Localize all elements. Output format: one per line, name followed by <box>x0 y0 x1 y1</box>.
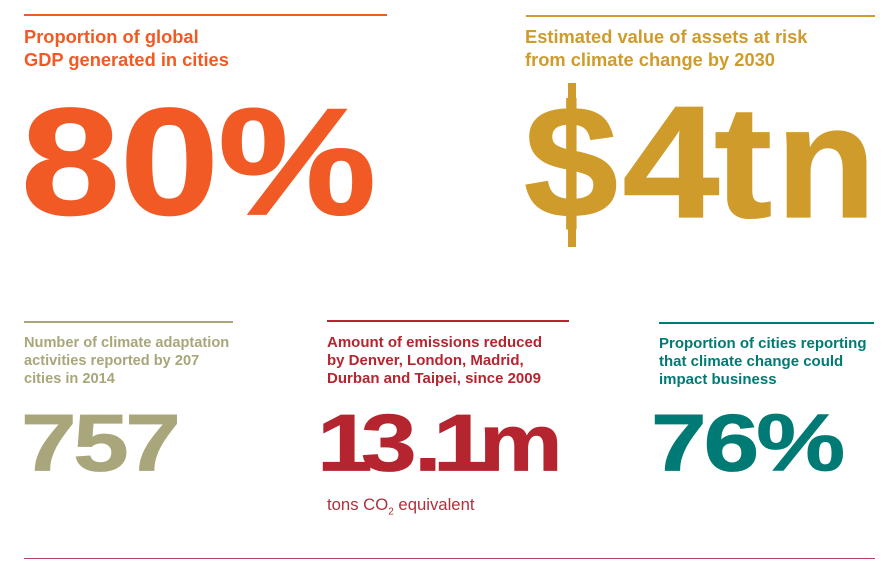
number: $4tn: 4t <box>623 72 776 251</box>
number: 13.1m: 13.1 <box>317 397 479 488</box>
panel: assets at risk stat <box>524 26 876 251</box>
heading: adaptation activities: cities in 2014 <box>24 371 115 387</box>
heading: emissions reduced: Durban and Taipei, since 2009 <box>327 370 541 387</box>
panel: cities reporting stat <box>651 335 867 488</box>
number: 13.1m: m <box>479 397 563 488</box>
heading: adaptation activities <box>24 335 229 387</box>
heading: GDP share: GDP generated in cities <box>24 49 229 70</box>
number: 80%: 80% <box>21 76 376 246</box>
number: $4tn <box>524 72 876 251</box>
heading: cities reporting: impact business <box>659 371 777 388</box>
heading: emissions reduced <box>327 334 542 387</box>
caption: tons CO2 equivalent: tons CO2 equivalent <box>327 495 474 517</box>
heading: adaptation activities: Number of climate adaptation <box>24 335 229 351</box>
heading: GDP share <box>24 26 229 70</box>
heading: cities reporting: Proportion of cities reporting <box>659 335 867 352</box>
heading: assets at risk <box>525 26 808 70</box>
number: 13.1m <box>317 397 563 488</box>
heading: cities reporting: that climate change could <box>659 353 843 370</box>
heading: emissions reduced: Amount of emissions reduced <box>327 334 542 351</box>
number: $4tn: n <box>776 72 876 251</box>
heading: adaptation activities: activities reported by 207 <box>24 353 199 369</box>
panel: GDP share stat <box>21 26 376 246</box>
heading: assets at risk: Estimated value of assets at risk <box>525 26 807 47</box>
heading: cities reporting <box>659 335 867 388</box>
number: 76%: 76% <box>651 397 842 488</box>
heading: GDP share: Proportion of global <box>24 26 199 47</box>
heading: emissions reduced: by Denver, London, Madrid, <box>327 352 524 369</box>
heading: assets at risk: from climate change by 2030 <box>525 49 775 70</box>
number: 757: 757 <box>21 398 177 488</box>
panel: adaptation activities stat <box>21 335 229 488</box>
panel: emissions reduced stat <box>317 334 563 517</box>
number: $4tn: $ <box>524 72 620 251</box>
